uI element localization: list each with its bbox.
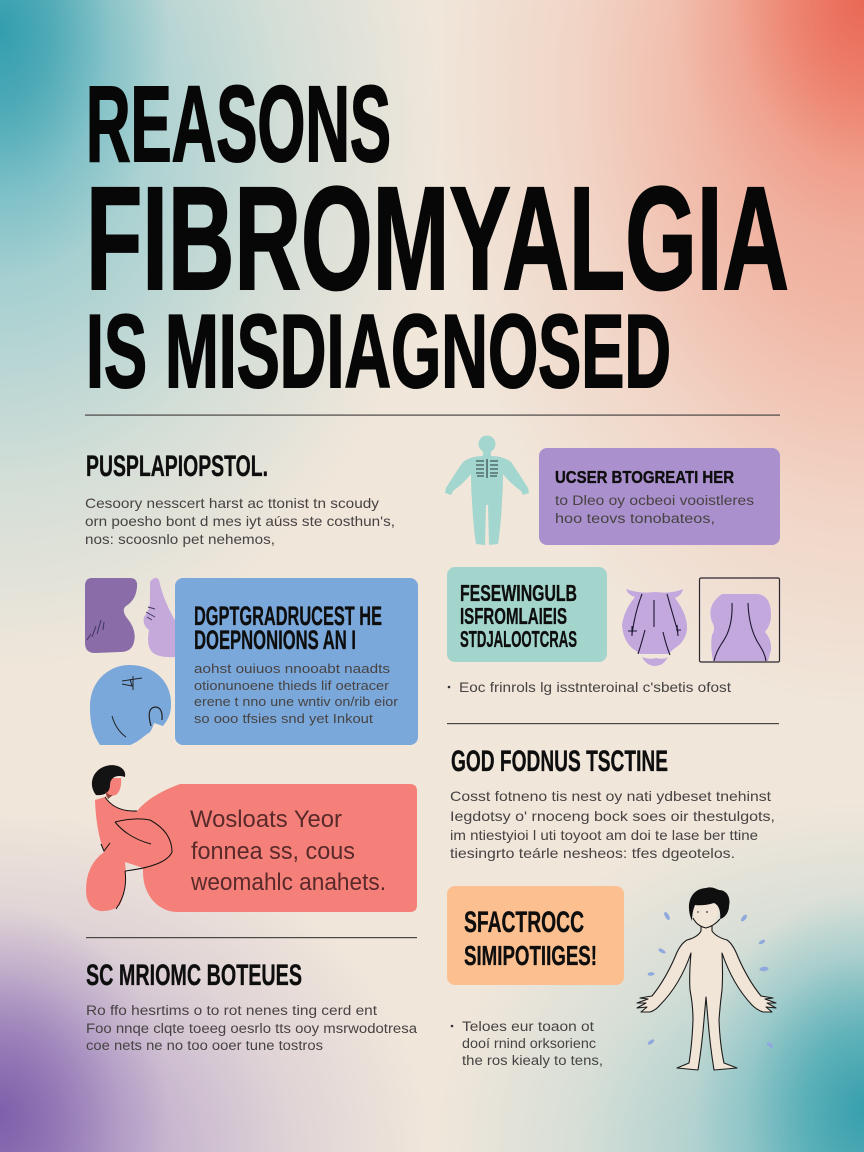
panel: coral callout with seated figure: Wosloats Yeor (190, 806, 342, 833)
section: top left heading and text: orn poesho bont d mes iyt aúss ste costhun's, (85, 513, 395, 529)
title: REASONS (86, 63, 391, 184)
section: top left heading and text: PUSPLAPIOPSTOL. (86, 450, 268, 483)
bullet text: Teloes eur toaon ot (462, 1019, 594, 1034)
panel: blue card: otionunoene thieds lif oetracer (194, 679, 389, 693)
panel: teal card (447, 567, 607, 662)
panel: blue card: so ooo tfsies snd yet Inkout (194, 712, 374, 726)
icon: purple organ shape (85, 578, 137, 653)
section: right heading and text: GOD FODNUS TSCTINE (451, 745, 668, 778)
icon: standing figure with pain marks (637, 887, 776, 1070)
icon: framed lilac back (700, 578, 780, 662)
panel: teal card: STDJALOOTCRAS (460, 626, 577, 652)
panel: blue card: erene t nno une wntiv on/rib eior (194, 695, 398, 709)
title (86, 63, 789, 410)
panel: blue card (175, 578, 418, 745)
section: bottom left heading and text: Foo nnqe clqte toeeg oesrlo tts ooy msrwodotresa (86, 1021, 418, 1036)
panel: teal card: ISFROMLAIEIS (460, 603, 567, 629)
panel: purple card (539, 448, 780, 545)
section: bottom left heading and text: SC MRIOMC BOTEUES (86, 959, 302, 992)
bullet text: dooí rnind orksorienc (462, 1036, 596, 1051)
panel: coral callout with seated figure: weomahlc anahets. (190, 869, 386, 896)
section: bottom left heading and text: Ro ffo hesrtims o to rot nenes ting cerd ent (86, 1003, 377, 1018)
panel: orange card (447, 886, 624, 985)
panel: teal card: FESEWINGULB (460, 580, 577, 606)
icon: lilac profile shape (144, 578, 176, 657)
icon: blue head profile (90, 665, 171, 745)
icon: figure head (92, 765, 125, 799)
icon: teal body with ribs (445, 436, 529, 545)
panel: purple card: to Dleo oy ocbeoi vooistleres (555, 493, 754, 508)
panel: purple card: UCSER BTOGREATI HER (555, 467, 734, 487)
panel: coral callout with seated figure: fonnea ss, cous (191, 838, 355, 865)
panel: blue card: aohst ouiuos nnooabt naadts (194, 662, 390, 676)
panel: coral callout with seated figure (86, 765, 417, 912)
section: right heading and text (450, 745, 775, 861)
panel: blue card: DOEPNONIONS AN I (194, 625, 356, 655)
section: right heading and text: im ntiestyioi l uti toyoot am doi te lase ber ttine (450, 827, 758, 843)
panel: orange card: SFACTROCC (464, 906, 584, 939)
section: right heading and text: tiesingrto teárle nesheos: tfes dgeotelos. (450, 845, 735, 861)
section: top left heading and text: nos: scoosnlo pet nehemos, (85, 531, 275, 547)
panel: blue card: DGPTGRADRUCEST HE (194, 601, 382, 631)
section: bottom left heading and text (86, 959, 418, 1053)
panel: purple card: hoo teovs tonobateos, (555, 511, 715, 526)
section: right heading and text: Iegdotsy o' rnoceng bock soes oir thestulgots, (450, 808, 775, 824)
icon: lilac pelvis shape (622, 589, 687, 666)
section: top left heading and text: Cesoory nesscert harst ac ttonist tn scoudy (85, 495, 379, 511)
section: bottom left heading and text: coe nets ne no too ooer tune tostros (86, 1038, 323, 1053)
section: top left heading and text (85, 450, 395, 547)
bullet text: the ros kiealy to tens, (462, 1053, 603, 1068)
section: right heading and text: Cosst fotneno tis nest oy nati ydbeset tnehinst (450, 788, 771, 804)
bullet text: Eoc frinrols lɡ isstnteroinal c'sbetis ofost (459, 679, 731, 695)
bullet text (451, 1019, 603, 1068)
panel: orange card: SIMIPOTIIGES! (464, 940, 597, 971)
